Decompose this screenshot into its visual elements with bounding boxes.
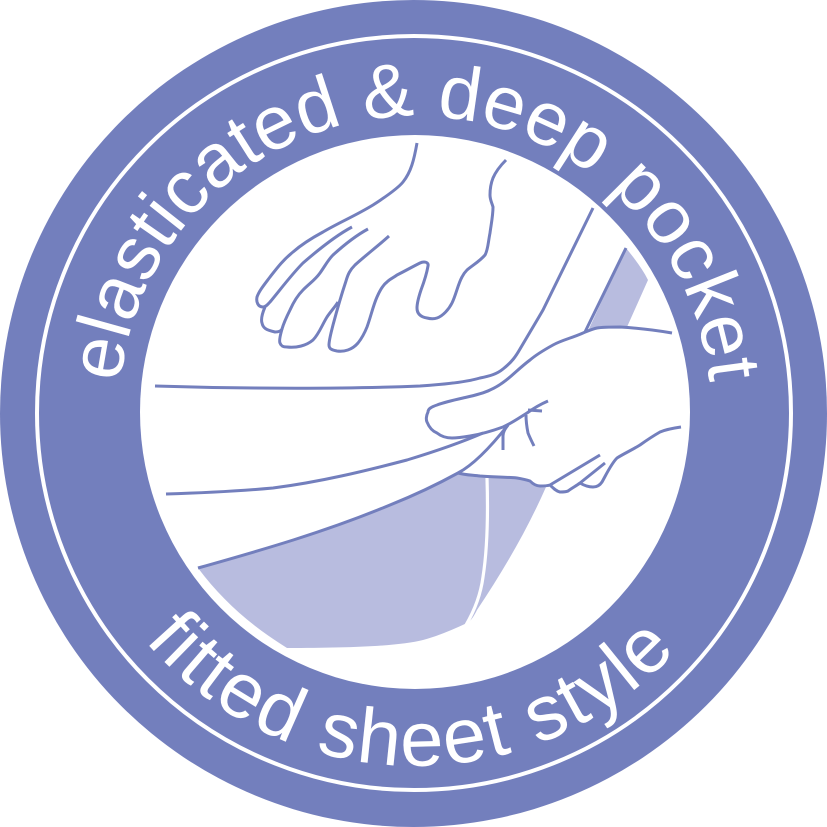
shaded mattress corner [588, 248, 648, 331]
mattress corner edge line [585, 248, 626, 332]
heading: elasticated & deep pocket: elasticated & deep pocket [76, 64, 758, 382]
illustration: hands lifting fitted sheet [155, 143, 681, 648]
white sheet seam [466, 478, 488, 625]
heading: fitted sheet style: fitted sheet style [149, 612, 668, 766]
shaded sheet underside [198, 473, 546, 648]
sheet hem [198, 425, 508, 568]
sheet top edge line [166, 433, 483, 494]
mattress edge line [155, 208, 593, 388]
upper hand [257, 143, 506, 351]
lower hand [426, 327, 681, 492]
